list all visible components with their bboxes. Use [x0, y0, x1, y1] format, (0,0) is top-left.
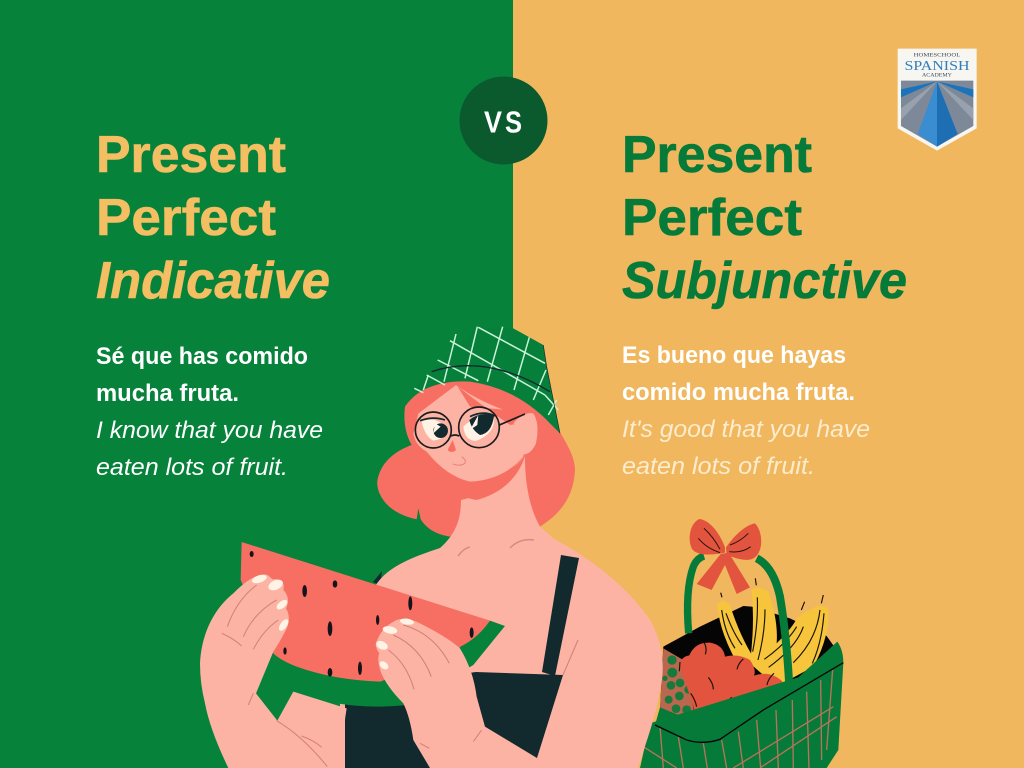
panel: green left background: [0, 0, 513, 768]
head: [405, 327, 567, 550]
panel: yellow right background: [513, 0, 1024, 768]
neck: [440, 457, 567, 550]
illustration: fruit basket: [640, 519, 843, 768]
dress strap back: [373, 571, 382, 585]
hair under chin shadow: [435, 457, 525, 500]
logo: homeschool spanish academy shield: SPANISH: [904, 59, 969, 74]
watermelon: [241, 542, 505, 721]
heading: present perfect indicative: Present: [96, 126, 286, 184]
logo: homeschool spanish academy shield: HOMESCHOOL: [914, 53, 960, 59]
vs badge: V: [484, 104, 502, 140]
text block: subjunctive example: eaten lots of fruit.: [622, 453, 815, 480]
logo: homeschool spanish academy shield: [898, 49, 977, 151]
text block: indicative example: mucha fruta.: [96, 380, 239, 407]
text block: subjunctive example: [622, 342, 870, 480]
collarbone lines: [458, 540, 534, 556]
eyes: [420, 413, 495, 441]
rind: [256, 621, 505, 721]
flesh: [241, 542, 490, 682]
text block: subjunctive example: It's good that you have: [622, 416, 870, 443]
grapes: [660, 648, 697, 723]
arm crease: [563, 640, 578, 675]
black dress: [345, 555, 579, 768]
basket rim: [655, 642, 843, 742]
text block: indicative example: I know that you have: [96, 417, 323, 444]
text block: subjunctive example: comido mucha fruta.: [622, 379, 855, 406]
nose and mouth: [448, 440, 456, 452]
basket handle: [688, 556, 704, 633]
left hand and arm: [200, 573, 347, 768]
text block: indicative example: Sé que has comido: [96, 343, 308, 370]
hat: [414, 327, 560, 433]
text block: indicative example: eaten lots of fruit.: [96, 454, 288, 481]
logo: homeschool spanish academy shield: ACADEMY: [922, 74, 953, 79]
heading: present perfect subjunctive: Present: [622, 126, 812, 184]
hair back: [377, 380, 575, 537]
face: [413, 385, 526, 482]
basket body with lattice: [640, 663, 843, 768]
vs badge: [460, 76, 548, 164]
text block: subjunctive example: Es bueno que hayas: [622, 342, 846, 369]
glasses: [415, 407, 525, 448]
body and shoulders: [340, 490, 663, 768]
heading: present perfect indicative: [96, 126, 330, 310]
illustration: woman with watermelon: [200, 327, 663, 768]
basket interior: [660, 606, 837, 730]
heading: present perfect subjunctive: Subjunctive: [622, 252, 907, 310]
heading: present perfect indicative: Perfect: [96, 189, 276, 247]
vs badge: S: [505, 104, 522, 140]
seeds: [250, 551, 474, 677]
red apples: [680, 643, 783, 724]
text block: indicative example: [96, 343, 323, 481]
bananas: [717, 578, 828, 687]
right hand and forearm: [375, 618, 545, 768]
heading: present perfect subjunctive: [622, 126, 907, 310]
heading: present perfect indicative: Indicative: [96, 252, 330, 310]
ear: [513, 413, 537, 454]
heading: present perfect subjunctive: Perfect: [622, 189, 802, 247]
fringe hair: [405, 384, 540, 433]
red bow: [690, 519, 761, 594]
